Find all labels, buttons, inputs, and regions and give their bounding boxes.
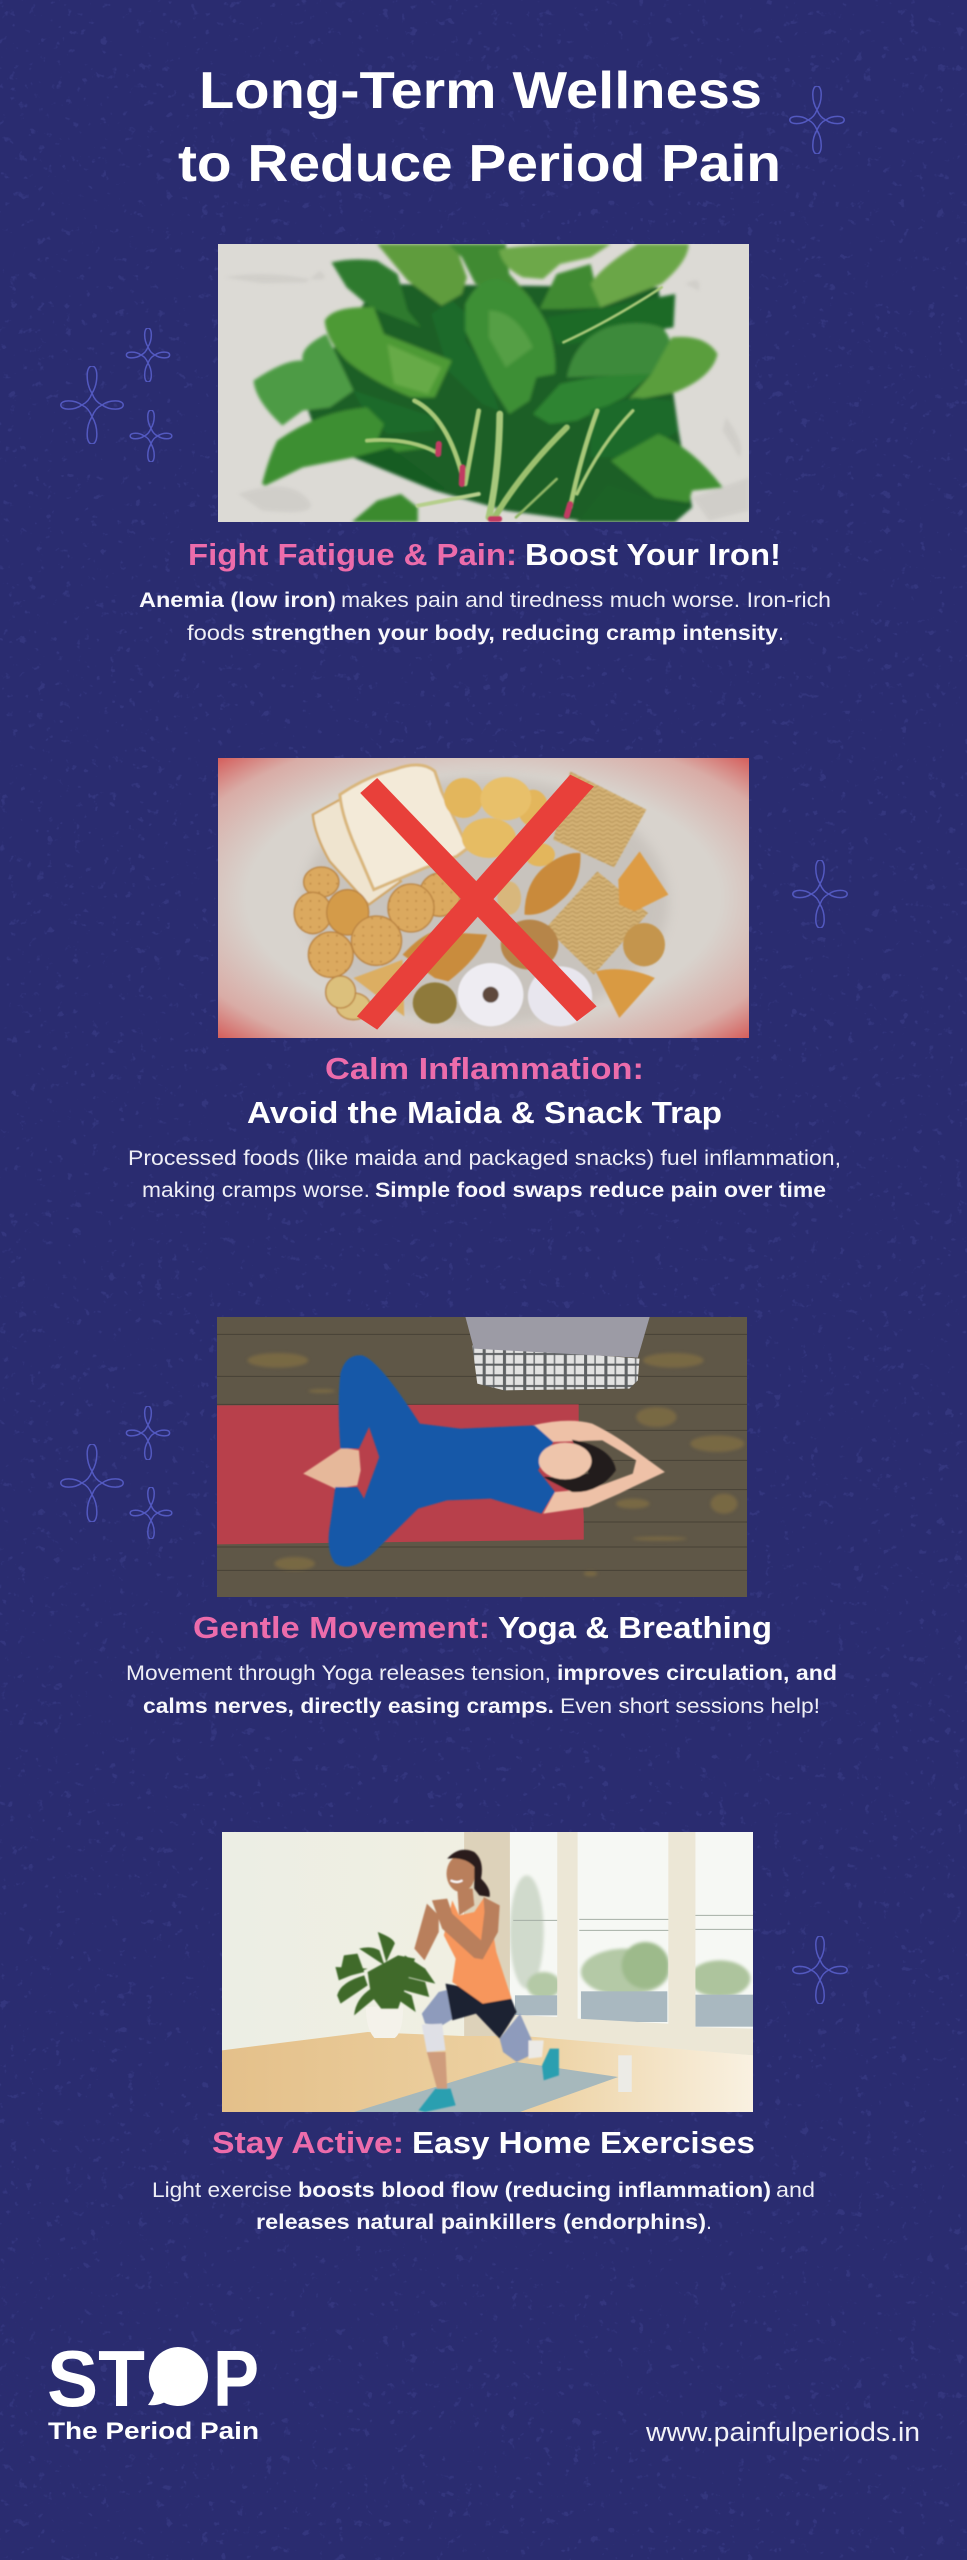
text: movement body: Even short sessions help! xyxy=(560,1694,820,1718)
text: inflammation body xyxy=(128,1146,841,1202)
photo: yoga pose xyxy=(217,1317,747,1597)
blue outfit xyxy=(329,1355,555,1567)
heading: iron xyxy=(188,537,781,572)
orange top xyxy=(444,1897,512,2004)
photo: spinach xyxy=(218,244,749,522)
logo: P xyxy=(213,2334,259,2423)
bread xyxy=(313,765,468,905)
heading: movement: Gentle Movement: xyxy=(193,1610,490,1645)
heading: inflammation: Avoid the Maida & Snack Trap xyxy=(247,1095,722,1130)
shorts xyxy=(446,1984,517,2039)
icon: sparkle right two xyxy=(792,860,848,928)
text: inflammation body: Simple food swaps reduce pain over time xyxy=(375,1178,826,1202)
text: iron body: strengthen your body, reducing cramp intensity xyxy=(251,621,778,645)
yoga mat and bottle xyxy=(354,2055,632,2112)
red cross xyxy=(357,775,597,1030)
text: movement body xyxy=(126,1661,837,1718)
icon: speech bubble xyxy=(148,2347,208,2406)
text: exercise body xyxy=(152,2178,815,2234)
hair and face xyxy=(539,1440,616,1492)
text: movement body: improves circulation, and xyxy=(557,1661,837,1685)
spinach dark mass xyxy=(303,284,692,522)
crackers xyxy=(294,867,460,1020)
text: iron body: . xyxy=(778,621,784,645)
photo: processed food crossed out xyxy=(218,758,749,1038)
text: inflammation body: making cramps worse. xyxy=(142,1178,370,1202)
yoga mat xyxy=(217,1404,584,1544)
donuts xyxy=(458,963,592,1026)
icon: sparkle cluster one xyxy=(61,328,172,462)
icon: sparkle top right xyxy=(789,86,845,154)
title xyxy=(178,62,781,193)
floor xyxy=(222,2032,753,2112)
heading: exercise: Stay Active: xyxy=(212,2125,404,2160)
head and hair xyxy=(447,1855,475,1892)
far arm xyxy=(414,1904,439,1960)
chips xyxy=(444,777,555,866)
spinach stems xyxy=(367,287,662,519)
text: exercise body: releases natural painkillers (endorphins) xyxy=(256,2210,706,2234)
title: Long-Term Wellness xyxy=(199,62,762,120)
text: movement body: Movement through Yoga releases tension, xyxy=(126,1661,551,1685)
woman's feet xyxy=(303,1448,361,1489)
text: exercise body: Light exercise xyxy=(152,2178,292,2202)
website url: www.painfulperiods.in xyxy=(645,2417,920,2447)
back leg xyxy=(500,2014,532,2062)
heading: iron: Fight Fatigue & Pain: xyxy=(188,537,517,572)
windows xyxy=(510,1832,753,2055)
icon: sparkle cluster two xyxy=(61,1406,172,1539)
pastries and samosas xyxy=(353,851,668,1024)
text: iron body: Anemia (low iron) xyxy=(139,588,336,612)
icon: sparkle right three xyxy=(792,1936,848,2004)
wood planks xyxy=(217,1334,747,1576)
text: iron body: makes pain and tiredness much worse. Iron-rich xyxy=(341,588,831,612)
logo: The Period Pain xyxy=(48,2418,259,2445)
arms xyxy=(533,1421,665,1514)
heading: inflammation xyxy=(247,1051,722,1130)
title: to Reduce Period Pain xyxy=(178,135,781,193)
noodle cakes xyxy=(546,771,648,975)
pillow and blanket xyxy=(465,1317,650,1390)
heading: exercise xyxy=(212,2125,755,2160)
woman exercising xyxy=(414,1850,559,2112)
heading: iron: Boost Your Iron! xyxy=(525,537,781,572)
text: iron body xyxy=(139,588,831,645)
text: inflammation body: Processed foods (like maida and packaged snacks) fuel inflammation, xyxy=(128,1146,841,1170)
heading: inflammation: Calm Inflammation: xyxy=(325,1051,644,1086)
heading: exercise: Easy Home Exercises xyxy=(412,2125,755,2160)
logo xyxy=(47,2334,259,2445)
logo: ST xyxy=(47,2334,145,2423)
text: exercise body: and xyxy=(776,2178,815,2202)
heading: movement xyxy=(193,1610,772,1645)
text: iron body: foods xyxy=(187,621,245,645)
near arm xyxy=(432,1897,500,1959)
curtain xyxy=(464,1832,510,2036)
front leg xyxy=(422,1989,456,2025)
photo: home exercise xyxy=(222,1832,753,2112)
text: exercise body: boosts blood flow (reducing inflammation) xyxy=(298,2178,771,2202)
neck xyxy=(457,1889,474,1915)
heading: movement: Yoga & Breathing xyxy=(498,1610,772,1645)
text: exercise body: . xyxy=(706,2210,712,2234)
text: movement body: calms nerves, directly easing cramps. xyxy=(143,1694,554,1718)
potted plant xyxy=(335,1932,435,2038)
